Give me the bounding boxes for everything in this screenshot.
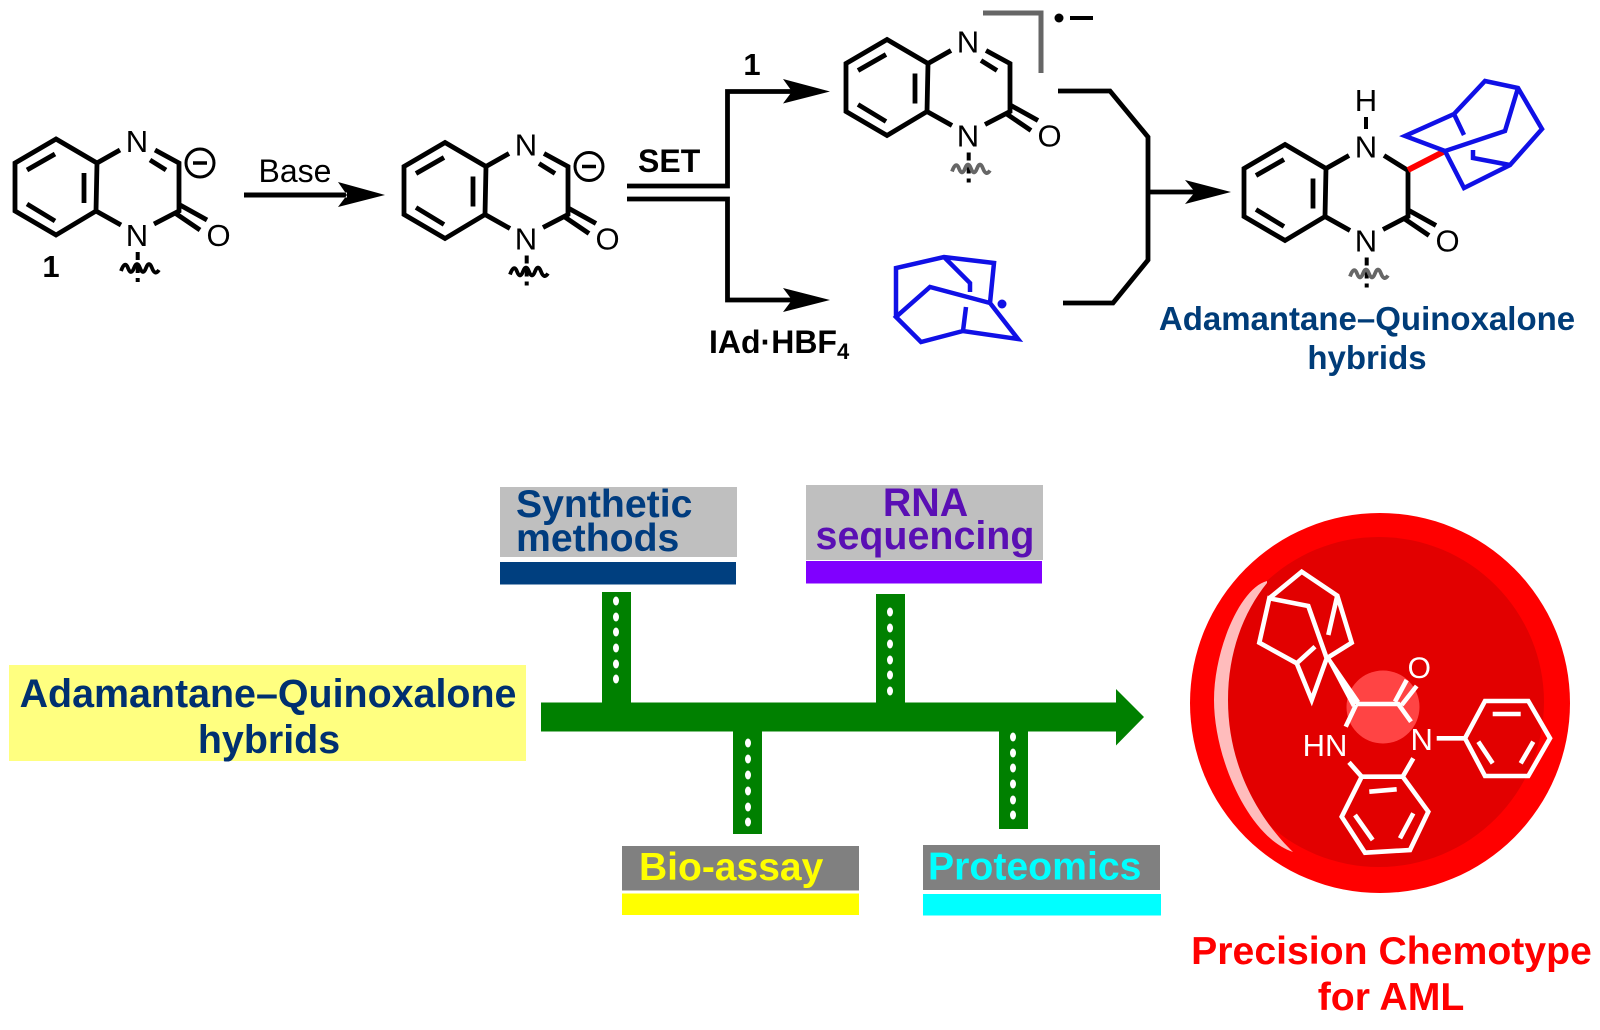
red blood cell with drug molecule: N — [1411, 722, 1433, 757]
label box: RNA sequencing — [806, 481, 1043, 584]
caption: Precision Chemotype for AML — [1191, 930, 1592, 1019]
red blood cell with drug molecule: HN — [1303, 728, 1347, 763]
molecule: quinoxalone anion intermediate: O — [595, 222, 620, 256]
molecule: radical anion — [846, 24, 1062, 182]
molecule: radical anion: N — [957, 24, 979, 60]
label box: Synthetic methods — [500, 483, 737, 584]
arrow: merging bracket — [1058, 91, 1231, 303]
molecule: adamantyl radical — [896, 257, 1018, 342]
stem: synthetic methods — [602, 592, 631, 704]
product name: hybrids — [1307, 339, 1427, 376]
box: Adamantane-Quinoxalone hybrids: Adamantane–Quinoxalone — [20, 672, 516, 716]
molecule: adamantane-quinoxalone product: N — [1355, 224, 1377, 258]
label: reagent 1: 1 — [743, 47, 761, 82]
label box: Bio-assay: Bio-assay — [639, 846, 824, 889]
red blood cell with drug molecule: O — [1408, 652, 1431, 685]
label box: RNA sequencing: RNA — [883, 481, 968, 525]
product name — [1159, 300, 1575, 376]
label box: Synthetic methods: methods — [516, 517, 679, 560]
molecule: adamantane-quinoxalone product: O — [1435, 224, 1460, 258]
box: Adamantane-Quinoxalone hybrids: hybrids — [198, 718, 340, 762]
label: Base: Base — [258, 153, 331, 189]
label box: Bio-assay — [622, 846, 859, 915]
arrow: main green timeline — [541, 689, 1144, 746]
molecule: radical anion: O — [1037, 118, 1062, 154]
molecule: adamantane-quinoxalone product: H — [1355, 83, 1377, 118]
label: SET: SET — [638, 143, 701, 179]
label: compound 1: 1 — [42, 249, 60, 284]
molecule: quinoxalone anion intermediate: N — [515, 128, 537, 162]
molecule: radical anion: N — [957, 118, 979, 154]
molecule: quinoxalone anion 1: O — [206, 218, 231, 253]
molecule: quinoxalone anion 1 — [15, 124, 231, 282]
molecule: quinoxalone anion intermediate — [404, 128, 620, 286]
arrow: base step — [244, 182, 385, 207]
molecule: adamantane-quinoxalone product — [1244, 81, 1542, 288]
label: IAd·HBF4: 4 — [837, 339, 850, 364]
stem: proteomics — [999, 730, 1028, 829]
caption: Precision Chemotype for AML: for AML — [1318, 976, 1464, 1019]
product name: Adamantane–Quinoxalone — [1159, 300, 1575, 337]
label box: Proteomics — [923, 845, 1161, 916]
box: Adamantane-Quinoxalone hybrids — [9, 665, 526, 762]
arrow: SET branching — [627, 79, 830, 312]
molecule: adamantane-quinoxalone product: N — [1355, 130, 1377, 164]
label box: RNA sequencing: sequencing — [816, 514, 1034, 558]
molecule: quinoxalone anion 1: N — [126, 218, 148, 253]
caption: Precision Chemotype for AML: Precision Chemotype — [1191, 930, 1592, 973]
red blood cell with drug molecule — [1190, 513, 1570, 893]
bracket: radical anion charge — [983, 13, 1093, 73]
label: IAd·HBF4: IAd·HBF — [709, 324, 837, 360]
molecule: quinoxalone anion intermediate: N — [515, 222, 537, 256]
stem: bio-assay — [733, 730, 762, 834]
label box: Synthetic methods: Synthetic — [516, 483, 692, 526]
stem: RNA sequencing — [876, 594, 905, 703]
molecule: quinoxalone anion 1: N — [126, 124, 148, 159]
label box: Proteomics: Proteomics — [928, 846, 1141, 888]
